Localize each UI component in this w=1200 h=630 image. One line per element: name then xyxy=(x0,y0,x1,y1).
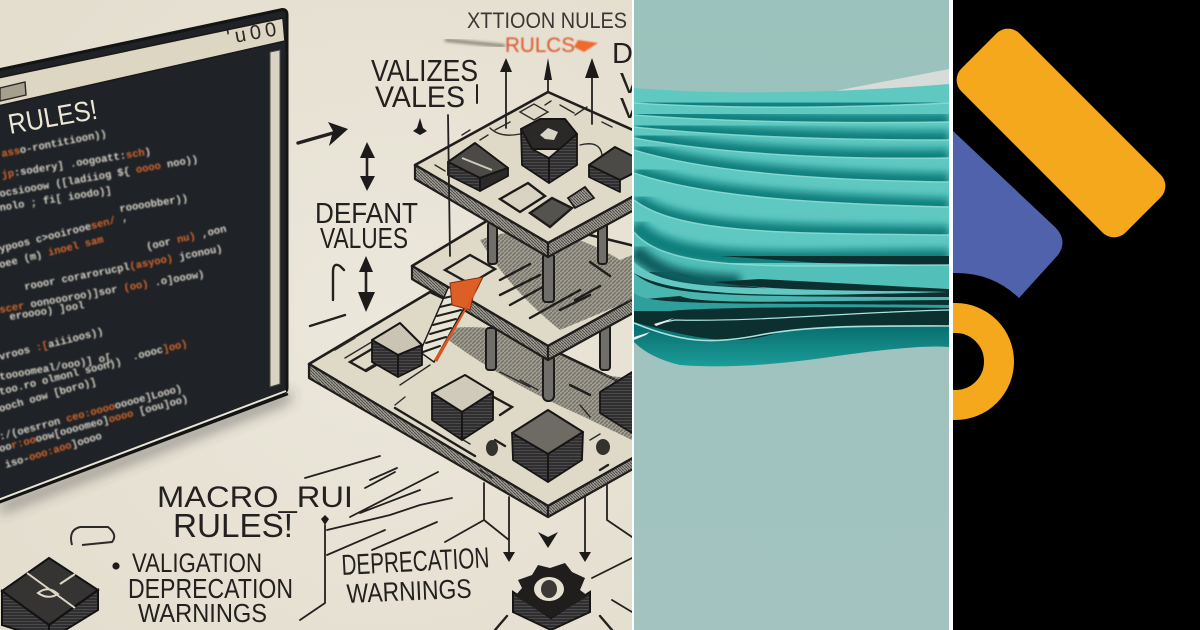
icon: black cube xyxy=(2,558,98,630)
divider: left xyxy=(632,0,634,630)
code lines: oee (m) inoel sam xyxy=(0,234,105,272)
code lines: roooobber)) xyxy=(119,193,189,216)
middle platform xyxy=(410,221,632,362)
label: values xyxy=(371,60,478,108)
box: left xyxy=(448,143,508,191)
label: validation deprecation warnings list: DEPRECATION xyxy=(128,573,293,604)
columns: upper level xyxy=(488,222,607,302)
panel: teal paper waves xyxy=(634,0,949,630)
label: default values: DEFANT xyxy=(315,198,418,230)
label: validation deprecation warnings list: WARNINGS xyxy=(138,598,267,628)
code lines: rooor corarorucpl(asyoo) jconou) xyxy=(23,244,224,294)
code lines: (oor nu) ,oon xyxy=(145,224,228,254)
bullet xyxy=(112,562,120,570)
code lines: :/(oesrron ceo:ooooooooe]Looo) xyxy=(0,383,184,444)
label: values: VALES xyxy=(375,81,465,114)
code lines: ypoos c>ooirooesen/ , xyxy=(0,212,129,256)
label: deprecation warnings xyxy=(342,547,488,603)
code lines: scer oonoooroo)]sor (oo) .o]ooow) xyxy=(0,269,206,317)
panel: orange and blue logo shapes xyxy=(953,0,1200,630)
box: lower left xyxy=(372,323,422,377)
label: macro rules: MACRO_RUI xyxy=(157,481,353,514)
scrollbar xyxy=(270,50,280,387)
label: cut-off default values right: D xyxy=(612,38,633,70)
top platform xyxy=(414,91,632,258)
columns: lower level xyxy=(486,320,610,401)
divider: right xyxy=(949,0,953,630)
code lines: asso-rontitioon)) xyxy=(0,129,108,161)
lower boxes xyxy=(372,323,640,482)
stair ramp with orange rail xyxy=(420,277,483,362)
box: right xyxy=(588,146,632,193)
logo wedge: blue xyxy=(953,131,1063,298)
code lines: jp:sodery] .oogoatt:sch) xyxy=(1,146,152,182)
code lines: vroos :[aiiioos)) xyxy=(0,326,105,364)
box: lower centre xyxy=(512,410,583,482)
icon: gear on a block xyxy=(513,563,590,630)
label: deprecation warnings: DEPRECATION xyxy=(341,542,490,582)
box: lower right xyxy=(599,371,632,434)
label: macro rules: RULES! xyxy=(173,507,293,544)
label: cut-off default values right: V xyxy=(620,93,640,125)
bottom platform xyxy=(308,290,632,518)
label: validation deprecation warnings list xyxy=(130,553,292,622)
code lines xyxy=(0,129,228,472)
window control buttons: 'u00 xyxy=(225,19,278,49)
box: central with emblem xyxy=(521,119,577,183)
box: lower middle xyxy=(432,375,493,440)
sketch mark xyxy=(71,527,114,545)
flat tiles xyxy=(500,183,545,212)
label: red rules xyxy=(443,36,598,53)
panel: isometric macro_rules sketch xyxy=(0,0,700,630)
label: cut-off default values right: V xyxy=(620,68,640,100)
logo bar: orange xyxy=(950,22,1172,244)
label: default values xyxy=(317,203,418,248)
label: macro rules xyxy=(160,486,350,538)
code lines: nolo ; fi[ ioodo)] xyxy=(0,185,113,215)
code lines: too.ro olmonl soon)) xyxy=(0,357,123,399)
label: default values: VALUES xyxy=(320,223,408,255)
code window xyxy=(0,10,290,512)
dark ribbon base xyxy=(634,322,949,366)
label: deprecation warnings: WARNINGS xyxy=(346,574,472,609)
label: validation deprecation warnings list: VALIGATION xyxy=(132,548,262,578)
label: red rules: RULCS xyxy=(505,34,575,57)
arrows and connector lines xyxy=(298,58,632,630)
code lines: oor:oooow[oooomeo]oooo [oou]oo) xyxy=(0,394,190,456)
code lines: iso-ooo:aoo]oooo xyxy=(4,431,104,472)
ribbon stack xyxy=(634,84,949,366)
code lines: ooch oow [boro)] xyxy=(0,377,98,416)
code lines: toooomeal/ooo)] o[ xyxy=(0,352,112,384)
label: values: VALIZES xyxy=(371,53,478,88)
grey wedge top right xyxy=(835,69,949,91)
code lines: .oooc]oo) xyxy=(131,339,189,364)
window heading: RULES! xyxy=(6,94,100,140)
label: cut-off default values right xyxy=(614,43,632,118)
code lines: eroooo) ]ool xyxy=(9,300,85,324)
label: top blurred rules: XTTIOON NULES xyxy=(467,8,627,33)
code lines: ocsiooow ([ladiiog ${ oooo noo)) xyxy=(0,154,199,201)
logo ring: orange xyxy=(912,318,999,405)
